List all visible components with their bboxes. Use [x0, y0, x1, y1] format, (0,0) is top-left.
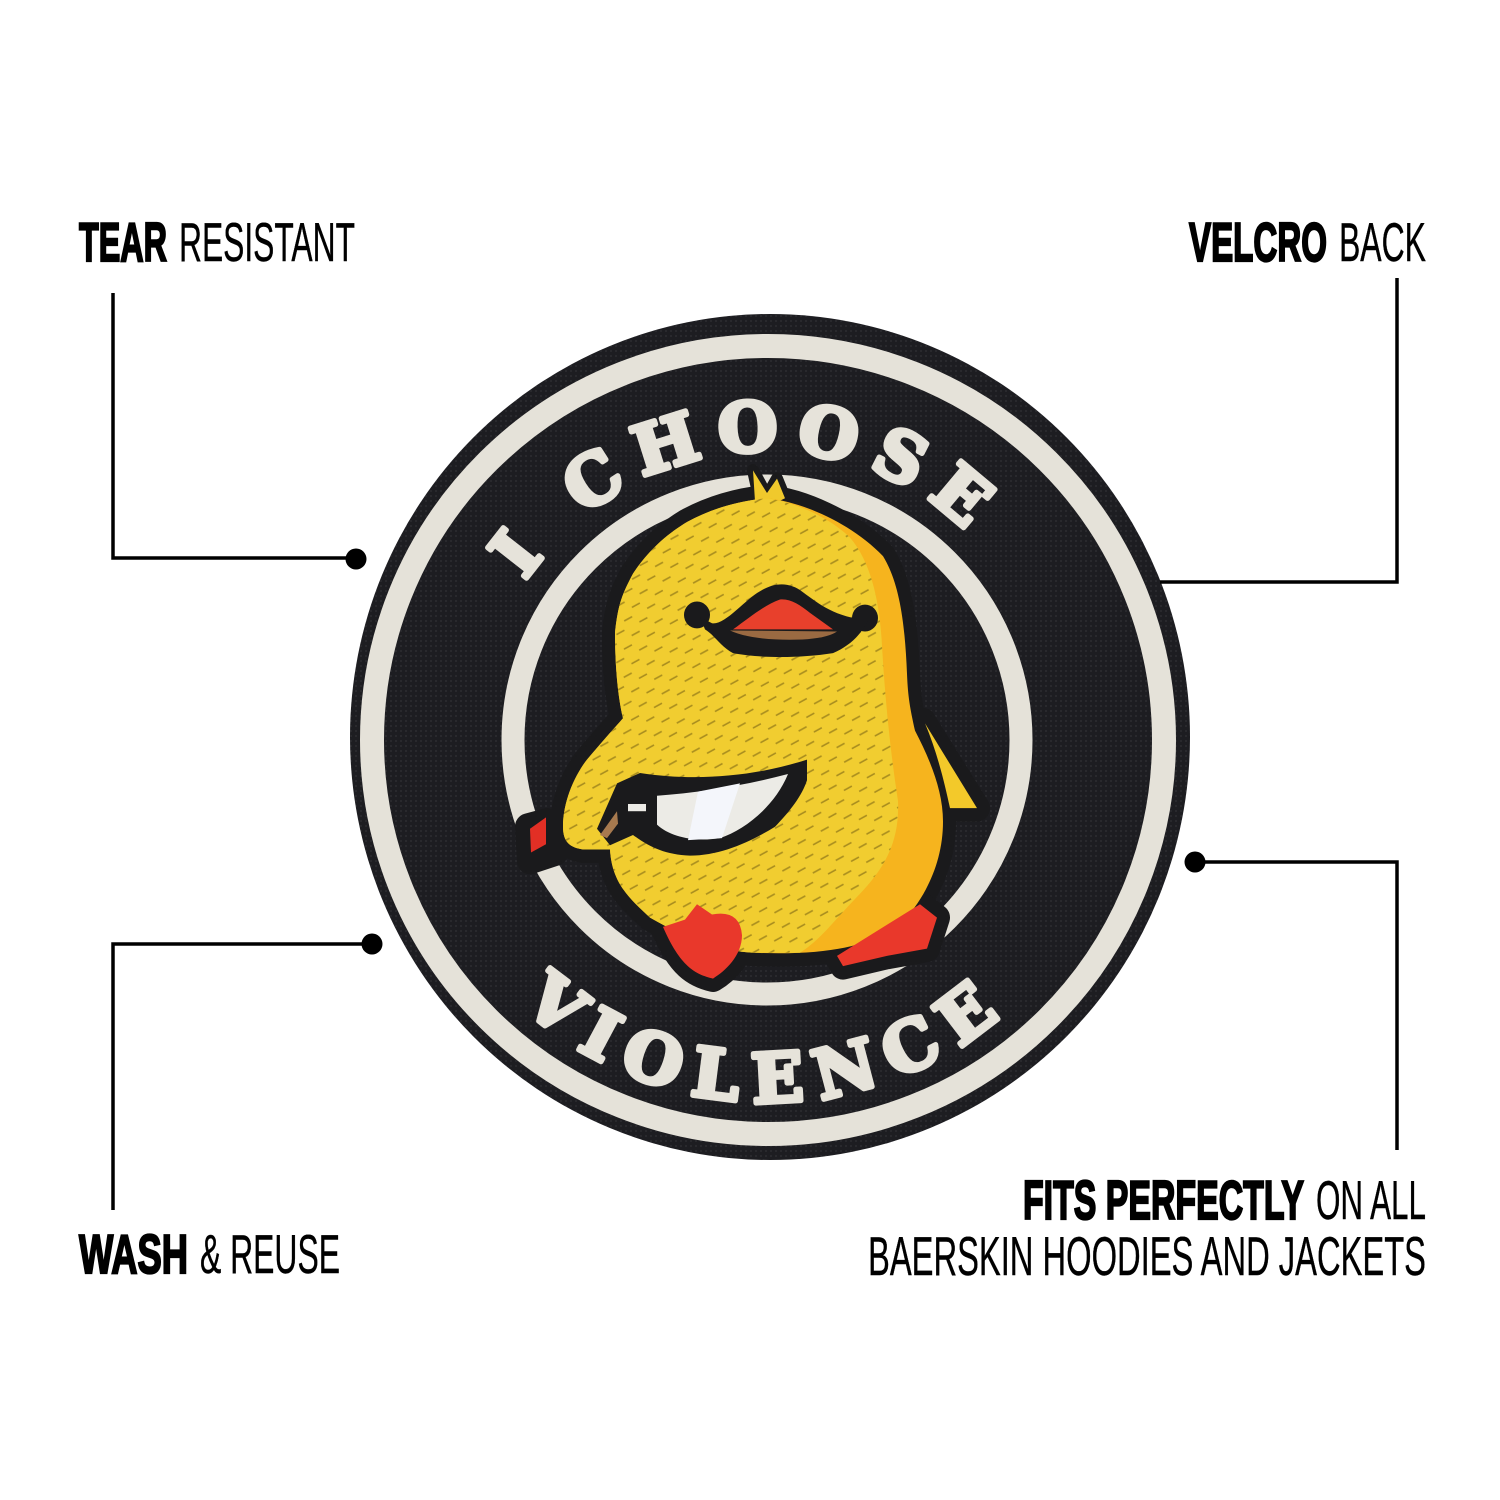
heading: tear resistant: [79, 211, 355, 273]
leader dot: [346, 548, 366, 570]
heading: wash and reuse: WASH: [79, 1223, 188, 1285]
heading: velcro back: BACK: [1339, 211, 1426, 273]
outer ring: [372, 346, 1164, 1134]
duck body shade: [563, 498, 943, 953]
knife blade: [657, 774, 788, 839]
arc text: I CHOOSE: I CHOOSE: [485, 398, 998, 581]
knife handle: [600, 811, 618, 838]
heading: tear resistant: TEAR: [79, 211, 167, 273]
knife shine: [688, 783, 740, 840]
leader dot: [362, 934, 382, 954]
leader line: [113, 944, 372, 1210]
knife outline: [597, 760, 807, 856]
duck body yellow: [563, 498, 898, 953]
duck illustration: [528, 470, 977, 979]
heading: wash and reuse: [79, 1223, 340, 1285]
duck beak red: [733, 599, 833, 629]
black halo around duck: [528, 498, 977, 979]
callout: tear resistant: [79, 211, 366, 570]
duck mouth brown: [730, 630, 837, 640]
duck stitching texture: [563, 498, 898, 953]
leader line: [1195, 862, 1397, 1150]
heading: velcro back: VELCRO: [1189, 211, 1327, 273]
heading: tear resistant: RESISTANT: [179, 211, 355, 273]
knife handle tip: [628, 804, 646, 811]
duck eyes: [684, 602, 878, 631]
duck beak outline: [700, 584, 868, 657]
callout: fits perfectly: [868, 852, 1426, 1287]
arc text: VIOLENCE: VIOLENCE: [536, 965, 1000, 1106]
duck tuft halo: [753, 470, 785, 501]
leader dot: [1184, 852, 1206, 872]
heading: fits perfectly: FITS PERFECTLY: [1023, 1169, 1304, 1231]
left foot: [663, 904, 742, 979]
patch base: [350, 314, 1190, 1160]
duck tuft: [753, 470, 785, 506]
callout: velcro back: [1160, 211, 1426, 582]
callout: wash and reuse: [79, 934, 382, 1285]
heading: fits perfectly: [868, 1169, 1426, 1287]
leader line: [113, 293, 356, 558]
leader line: [1160, 278, 1397, 582]
duck wing tail: [925, 723, 977, 808]
inner ring: [513, 486, 1021, 994]
heading: wash and reuse: & REUSE: [200, 1223, 340, 1285]
right foot: [837, 904, 937, 966]
blood drop: [530, 817, 546, 853]
patch: I Choose Violence: [350, 314, 1190, 1160]
